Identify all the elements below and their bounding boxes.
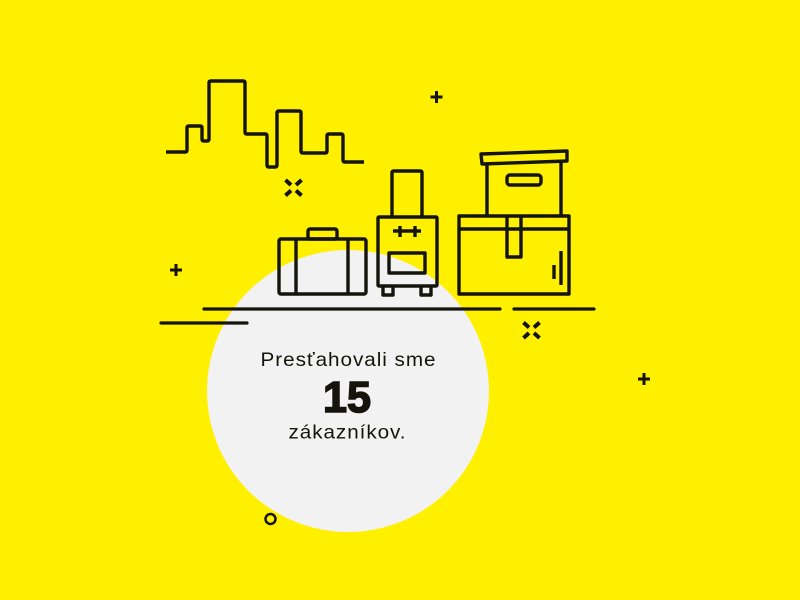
icon: cross sparkle lower — [524, 322, 540, 338]
icon: trolley bag — [378, 171, 437, 295]
grey circle panel — [207, 250, 489, 532]
icon: small ring — [266, 514, 276, 524]
icon: stacked boxes — [459, 151, 569, 294]
ground lines — [161, 309, 594, 323]
text: number: 15 — [323, 373, 371, 422]
text: closing line: zákazníkov. — [288, 422, 406, 444]
icon: city skyline — [166, 81, 364, 167]
icon: suitcase — [279, 229, 366, 294]
icon: plus left — [170, 264, 182, 276]
icon: cross sparkle upper — [286, 180, 302, 196]
text: intro line: Presťahovali sme — [260, 349, 436, 371]
icon: plus top — [430, 91, 442, 103]
icon: plus right — [638, 373, 650, 385]
